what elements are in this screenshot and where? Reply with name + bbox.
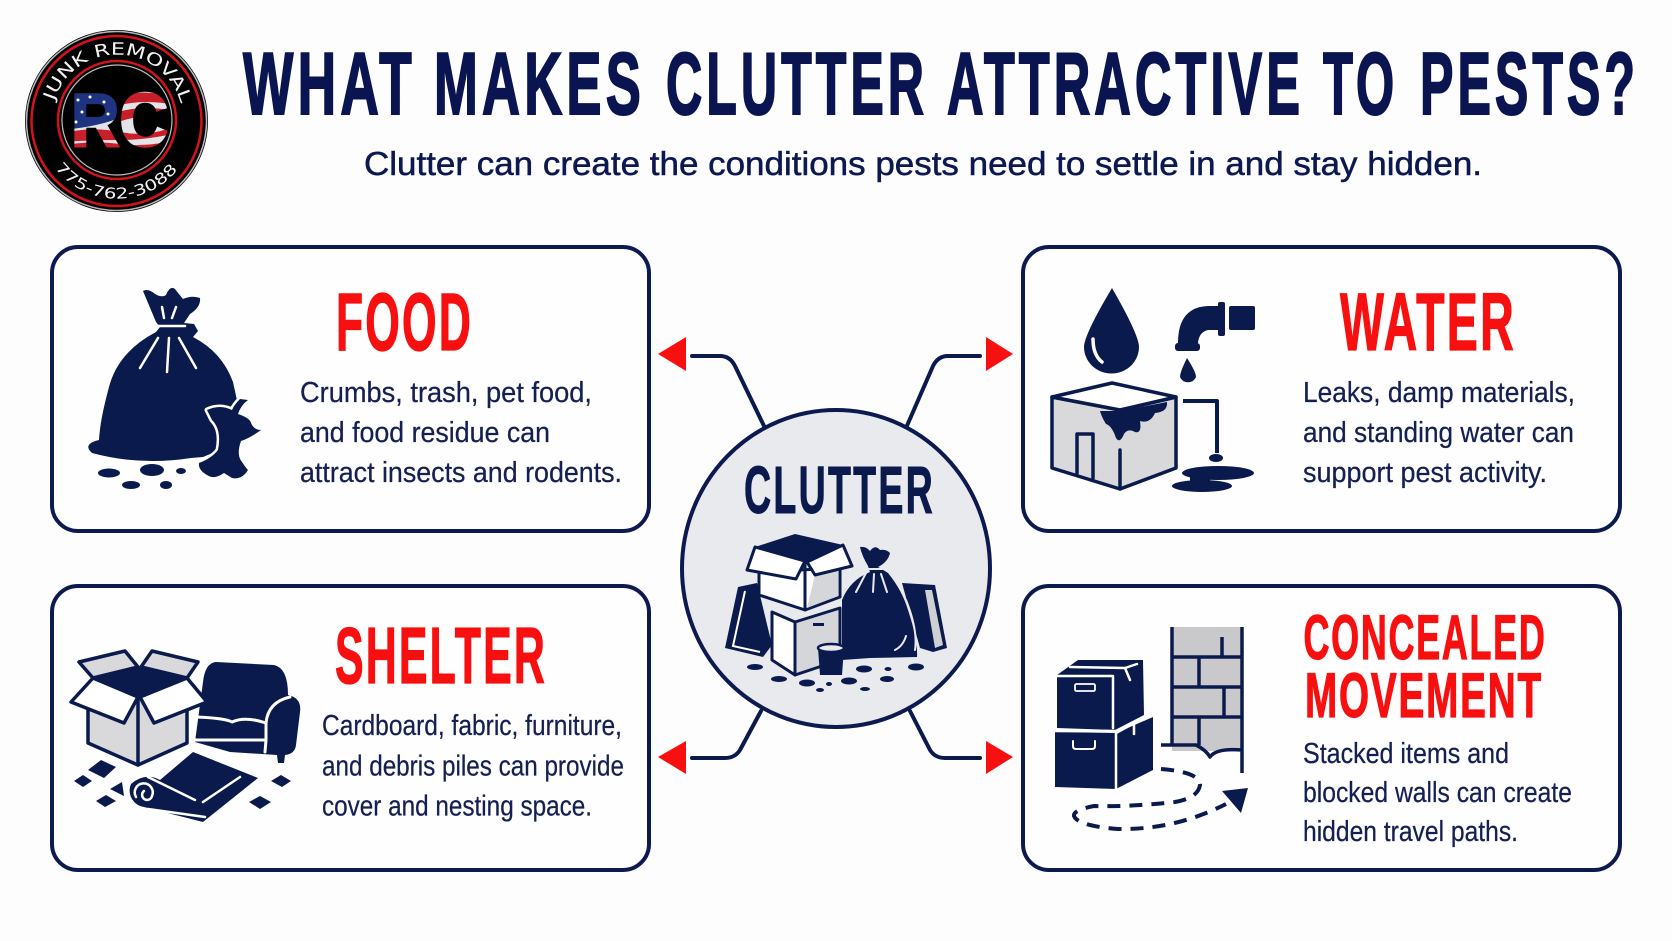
logo: RC Junk Removal badge: 775-762-3088 xyxy=(57,162,176,199)
logo: RC Junk Removal badge: RC xyxy=(71,78,168,162)
logo: RC Junk Removal badge: JUNK REMOVAL xyxy=(43,42,190,104)
icon: trash bag and apple core xyxy=(88,288,261,489)
text: concealed movement description: blocked walls can create xyxy=(1303,777,1572,809)
text: water description xyxy=(1303,377,1575,489)
icon: open box, armchair and blanket xyxy=(71,651,300,822)
connector: clutter to food xyxy=(658,337,765,428)
connector: clutter to shelter xyxy=(658,711,761,774)
text: shelter description: and debris piles can provide xyxy=(322,750,624,782)
title: ATTRACTIVE xyxy=(947,34,1304,133)
text: concealed movement description: hidden travel paths. xyxy=(1303,816,1518,848)
subtitle: Clutter can create the conditions pests need to settle in and stay hidden. xyxy=(364,145,1482,182)
text: concealed movement description: Stacked items and xyxy=(1303,738,1509,770)
text: food description: Crumbs, trash, pet food, xyxy=(300,377,592,409)
title: MAKES xyxy=(434,34,645,133)
heading: food: FOOD xyxy=(336,277,473,368)
title: WHAT xyxy=(243,34,416,133)
connector: clutter to concealed movement xyxy=(910,711,1013,774)
text: shelter description: cover and nesting space. xyxy=(322,790,592,822)
title xyxy=(243,34,1639,133)
heading: concealed movement xyxy=(1304,603,1546,731)
panel: concealed movement xyxy=(1023,586,1620,870)
text: concealed movement description xyxy=(1303,738,1572,848)
panel: shelter xyxy=(52,586,649,870)
text: water description: support pest activity. xyxy=(1303,457,1547,489)
panel: water xyxy=(1023,247,1620,531)
text: food description: attract insects and rodents. xyxy=(300,457,622,489)
text: water description: Leaks, damp materials, xyxy=(1303,377,1575,409)
text: shelter description: Cardboard, fabric, furniture, xyxy=(322,710,622,742)
connector: clutter to water xyxy=(906,337,1013,428)
icon: pile of boxes and trash bag xyxy=(725,534,947,692)
title: CLUTTER xyxy=(666,34,928,133)
heading: clutter: CLUTTER xyxy=(744,453,935,528)
text: food description xyxy=(300,377,622,489)
title: TO xyxy=(1323,34,1398,133)
panel: food xyxy=(52,247,649,531)
text: water description: and standing water can xyxy=(1303,417,1574,449)
icon: water drop, leaking pipe and damp box xyxy=(1052,288,1255,492)
icon: stacked boxes, brick wall and dashed path xyxy=(1055,627,1248,829)
center circle: clutter xyxy=(682,410,990,727)
logo: RC Junk Removal badge xyxy=(25,30,208,212)
brick wall xyxy=(1161,627,1242,773)
text: shelter description xyxy=(322,710,624,822)
heading: shelter: SHELTER xyxy=(335,611,547,700)
heading: water: WATER xyxy=(1340,277,1516,368)
text: food description: and food residue can xyxy=(300,417,550,449)
